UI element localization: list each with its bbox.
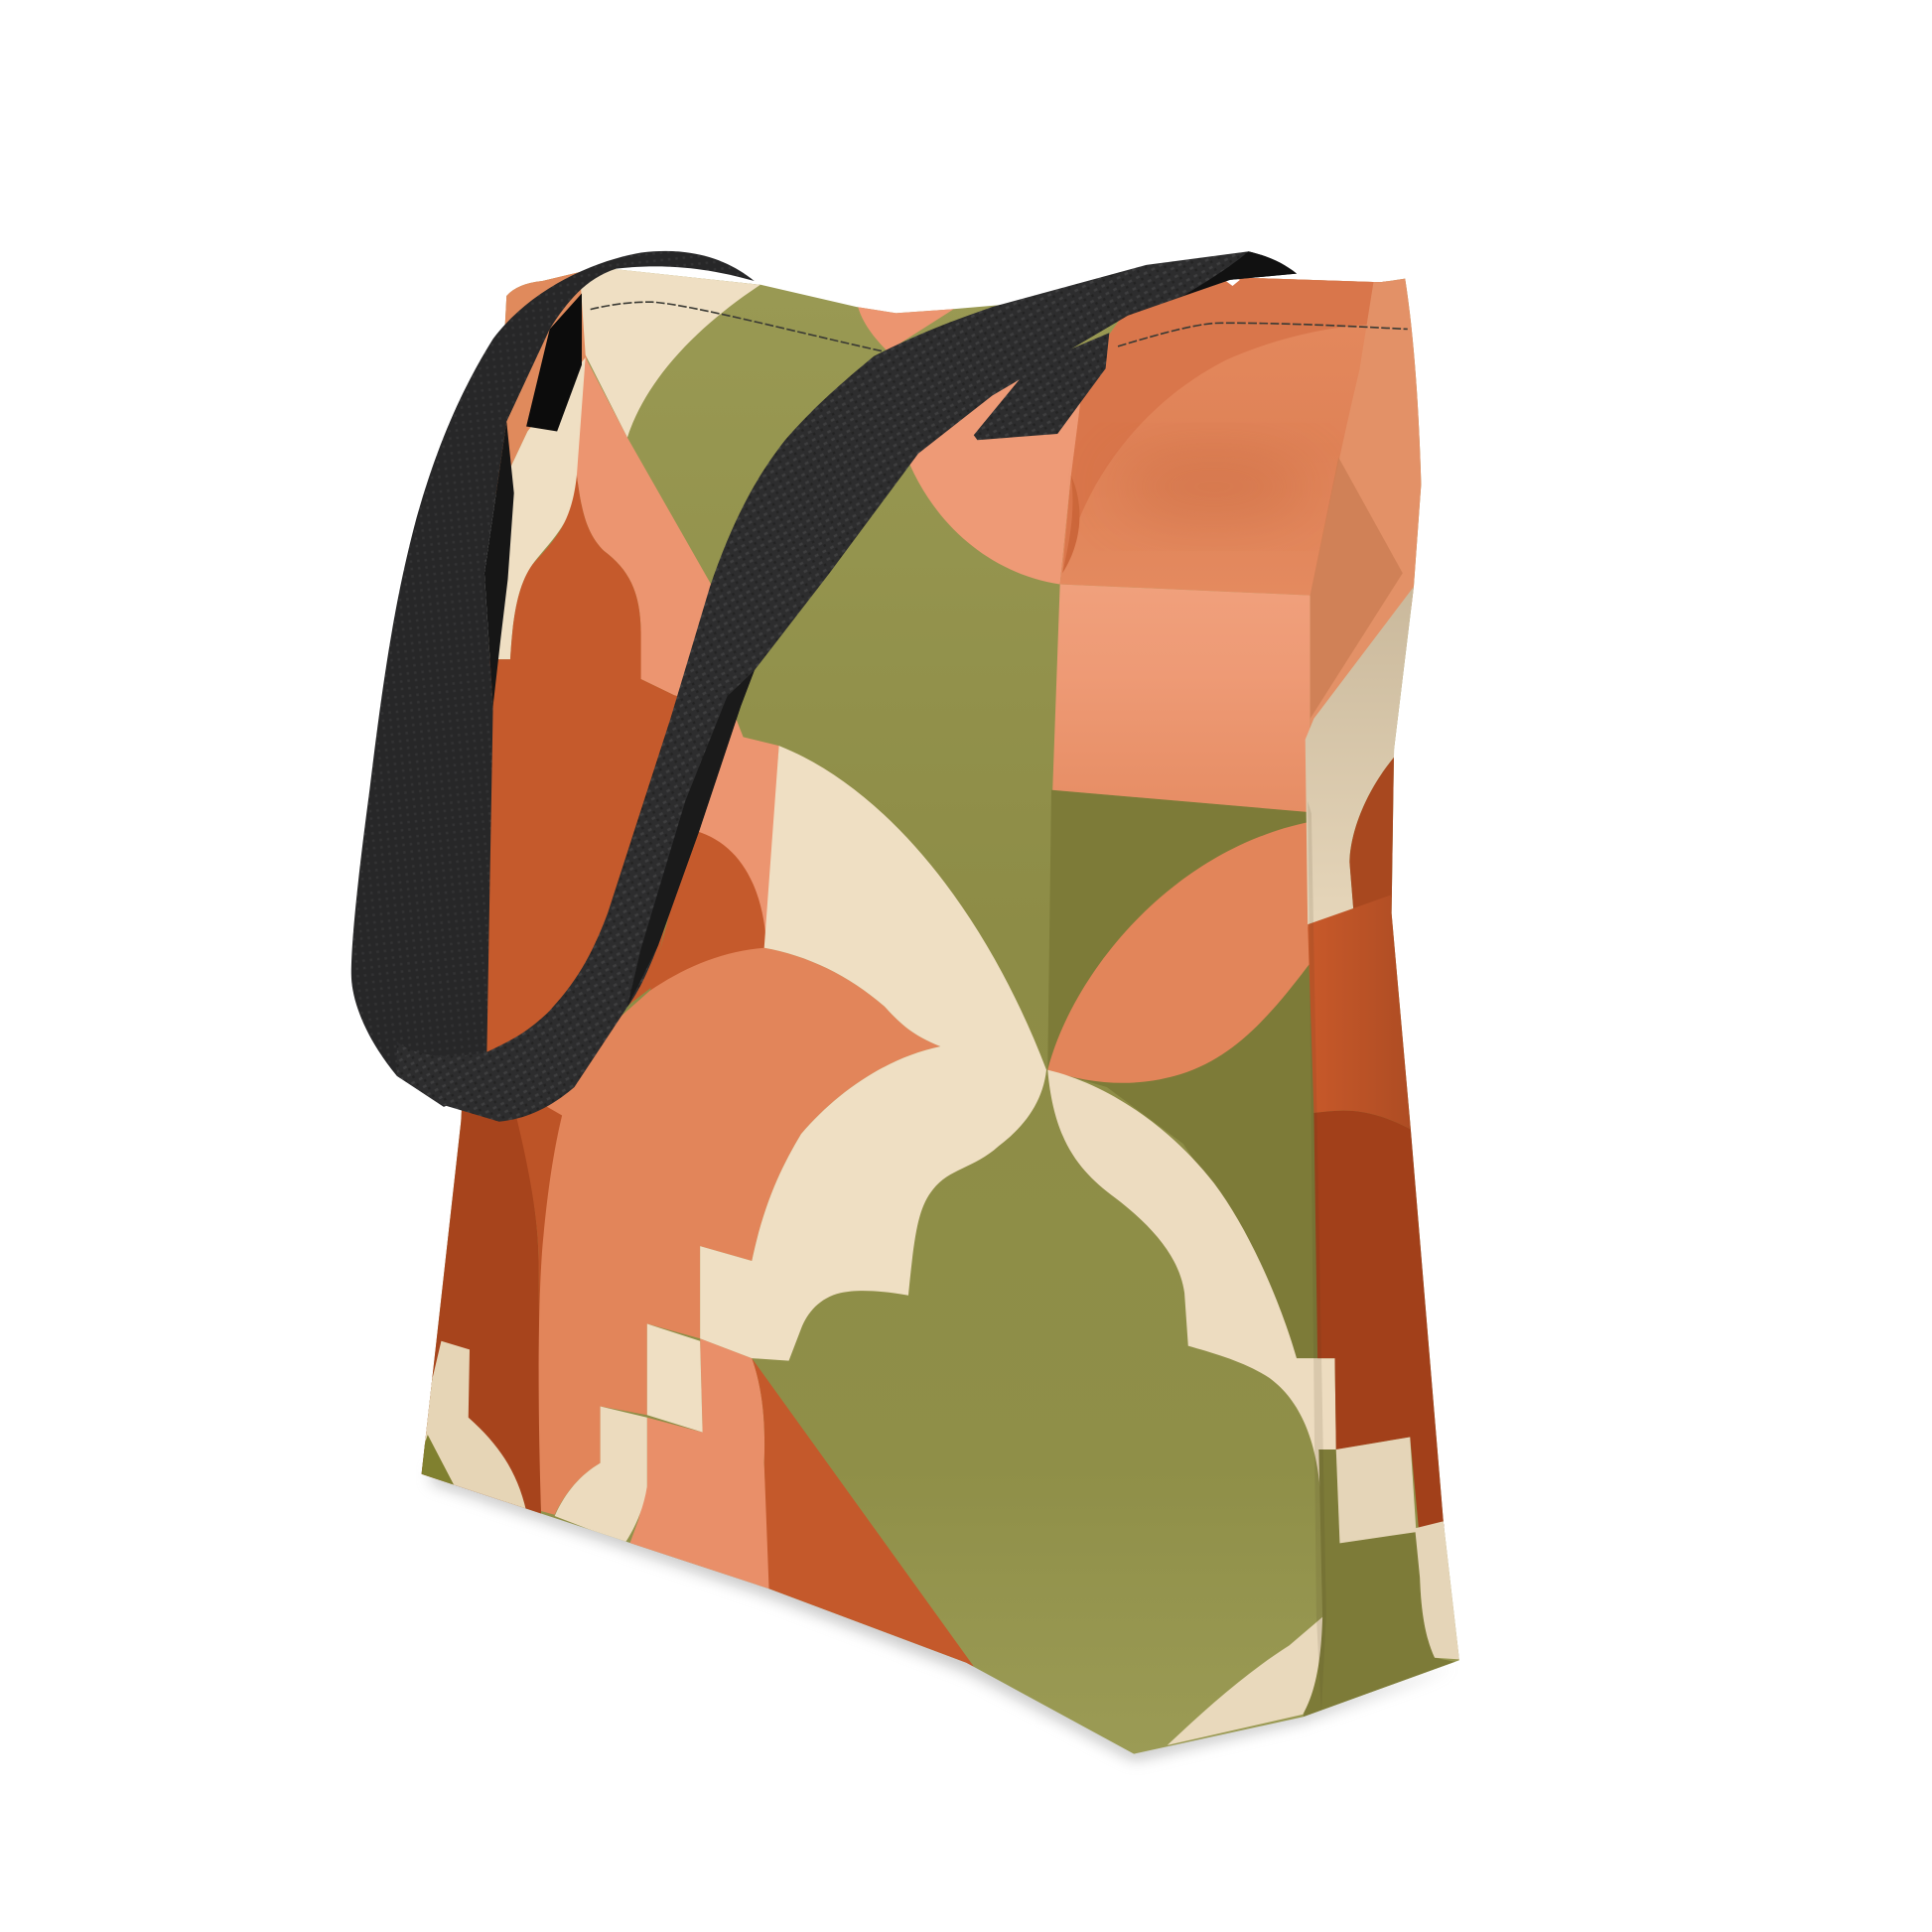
seam shadow — [1308, 801, 1326, 1714]
burnt orange dome — [649, 830, 766, 994]
gusset lower cream strip — [1416, 1521, 1459, 1660]
back strap band — [351, 251, 755, 1107]
strap lower fold — [627, 670, 755, 1007]
light salmon column — [699, 719, 778, 933]
cream lower step — [555, 1407, 647, 1543]
gusset rust panel — [1308, 896, 1411, 1130]
gusset cream band — [1305, 587, 1414, 927]
upper left orange sliver — [496, 272, 588, 490]
upper orange panel — [1060, 274, 1387, 596]
darker arc band — [1062, 274, 1387, 573]
salmon square — [1052, 584, 1311, 812]
light salmon ribbon — [577, 357, 711, 696]
salmon leaf — [1047, 822, 1311, 1083]
left cream column — [481, 357, 586, 659]
bottom left olive corner — [421, 1435, 454, 1485]
bottom left cream corner — [419, 1341, 526, 1511]
tote bag illustration — [351, 250, 1459, 1766]
burnt triangle — [752, 1358, 974, 1666]
stitching — [591, 302, 1408, 351]
dark olive quadrant — [1047, 790, 1321, 1358]
gusset cream square — [1336, 1438, 1416, 1543]
lower left dark rust panel — [421, 1110, 541, 1513]
strap inner fold — [1183, 251, 1297, 296]
front strap handle — [397, 251, 1297, 1122]
cream arch — [700, 746, 1046, 1361]
gusset diamond shade — [1311, 458, 1403, 719]
inner black tab — [526, 293, 582, 432]
upper cream peak — [579, 265, 760, 438]
strap underside glint — [1204, 265, 1240, 286]
ground shadow — [432, 1466, 1454, 1760]
front strap tab — [974, 333, 1109, 440]
gusset lower olive — [1303, 1449, 1466, 1720]
bottom cream tip — [1168, 1617, 1322, 1745]
upper peach circle — [909, 379, 1080, 584]
base olive panel — [407, 246, 1479, 1775]
upper gusset — [1311, 278, 1422, 727]
cream step square — [647, 1323, 703, 1433]
darkest arc sliver — [1062, 476, 1079, 573]
bag body — [407, 246, 1479, 1775]
inner strap shadow — [484, 422, 514, 706]
gusset dark rust panel — [1313, 1110, 1445, 1529]
gusset rust arc — [1349, 758, 1394, 908]
back strap handle — [351, 251, 755, 1107]
lower salmon block — [628, 1338, 770, 1596]
salmon top triangle — [858, 307, 954, 349]
fold shadow — [1164, 468, 1264, 510]
salmon bird shape — [530, 948, 940, 1515]
burnt orange tall panel — [486, 475, 677, 1052]
cream right arc — [1047, 1070, 1336, 1504]
burnt sliver — [516, 1106, 562, 1320]
